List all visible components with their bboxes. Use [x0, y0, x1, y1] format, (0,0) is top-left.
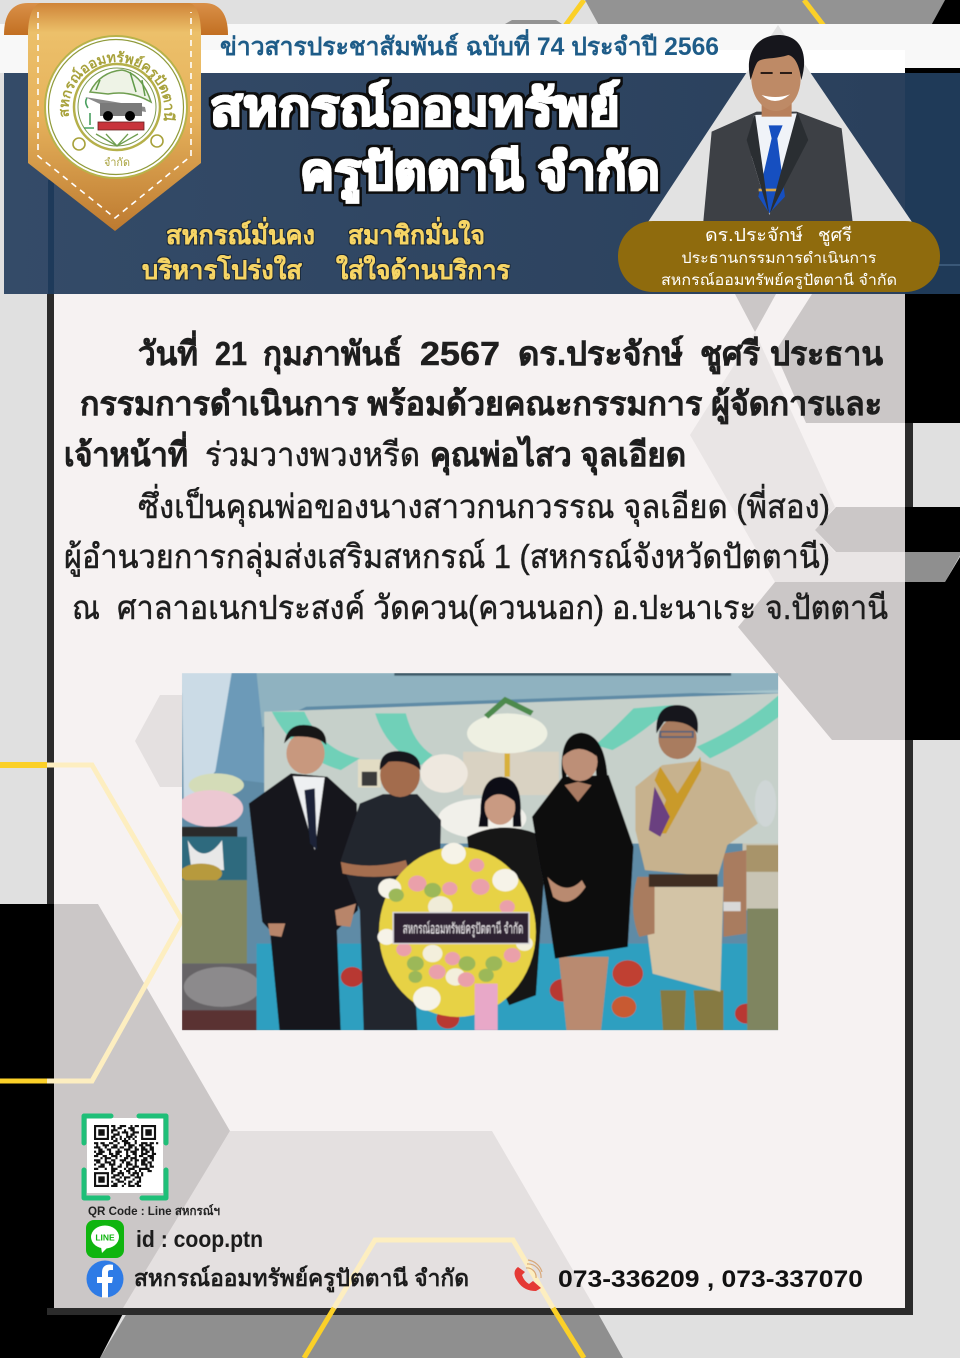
QR caption: QR Code : Line สหกรณ์ฯ [88, 1204, 220, 1218]
icon: LINE [86, 1220, 124, 1258]
icon: ringing phone [514, 1260, 542, 1291]
woman in black dress [532, 733, 633, 1030]
chairman name pill: ประธานกรรมการดำเนินการ [682, 250, 876, 267]
chairman name pill [618, 221, 940, 292]
woman in lace dress [467, 777, 544, 1005]
announcement text block [64, 330, 888, 626]
header white strip [0, 24, 960, 73]
slogan text: สหกรณ์มั่นคง [166, 217, 315, 250]
cooperative logo seal: สหกรณ์ออมทรัพย์ครูปัตตานี [60, 50, 176, 121]
chairman name pill: สหกรณ์ออมทรัพย์ครูปัตตานี จำกัด [661, 272, 897, 289]
announcement text block: ศาลาอเนกประสงค์ [117, 589, 365, 626]
announcement text block: 21 [215, 335, 247, 372]
cooperative logo seal [44, 35, 188, 179]
content panel with dark frame [0, 294, 913, 1315]
man in dark shirt [341, 751, 441, 1030]
icon: LINE: LINE [95, 1232, 115, 1242]
slogan text: ใส่ใจด้านบริการ [336, 255, 510, 285]
slogan text: บริหารโปร่งใส [142, 255, 302, 285]
title: cooperative name: ครูปัตตานี จำกัด [300, 144, 660, 203]
chairman name pill: ชูศรี [818, 225, 852, 246]
announcement text block: ผู้อำนวยการกลุ่มส่งเสริมสหกรณ์ 1 (สหกรณ์จังหวัดปัตตานี) [64, 538, 830, 577]
announcement text block: เจ้าหน้าที่ [64, 431, 188, 473]
announcement text block: วัดควน(ควนนอก) [373, 589, 604, 626]
slogan text [142, 217, 510, 285]
chairman name pill: ดร.ประจักษ์ [705, 225, 803, 245]
slogan text: สมาชิกมั่นใจ [348, 217, 485, 250]
man in black suit [249, 725, 358, 1030]
gold ribbon banner [4, 3, 228, 231]
decorative yellow hexagon outlines [0, 765, 584, 1358]
announcement text block: กุมภาพันธ์ [263, 335, 402, 375]
announcement text block: ดร.ประจักษ์ [518, 335, 684, 372]
LINE id: id : coop.ptn [136, 1226, 263, 1252]
announcement text block: ชูศรี [700, 335, 760, 375]
announcement text block: จ.ปัตตานี [765, 589, 888, 626]
phone numbers: 073-336209 , 073-337070 [558, 1266, 863, 1293]
chairman portrait backdrop triangle [648, 25, 912, 222]
event photo: group with funeral wreath [178, 673, 779, 1031]
cooperative logo seal: จำกัด [104, 157, 130, 169]
scout leader in khaki uniform [633, 705, 758, 1030]
QR code with green corner brackets [84, 1116, 166, 1198]
panel background hexagon shapes [54, 294, 905, 1308]
chairman portrait [703, 35, 853, 222]
announcement text block: ณ [72, 589, 100, 626]
announcement text block: ประธาน [770, 335, 883, 372]
flower wreath [377, 843, 536, 1030]
announcement text block: วันที่ [138, 330, 198, 372]
announcement text block: ร่วมวางพวงหรีด [205, 436, 420, 473]
title: cooperative name: สหกรณ์ออมทรัพย์ [210, 80, 620, 136]
announcement text block: ซึ่งเป็นคุณพ่อของนางสาวกนกวรรณ จุลเอียด (พี่สอง) [138, 484, 830, 527]
title: cooperative name [210, 80, 660, 203]
icon: Facebook [86, 1260, 124, 1298]
announcement text block: กรรมการดำเนินการ พร้อมด้วยคณะกรรมการ ผู้จัดการและ [80, 385, 882, 425]
announcement text block: อ.ปะนาเระ [612, 589, 756, 626]
Facebook page name: สหกรณ์ออมทรัพย์ครูปัตตานี จำกัด [134, 1265, 469, 1293]
flower wreath: สหกรณ์ออมทรัพย์ครูปัตตานี จำกัด [403, 921, 523, 938]
newsletter issue heading: ข่าวสารประชาสัมพันธ์ ฉบับที่ 74 ประจำปี 2566 [220, 29, 719, 61]
header navy band [4, 73, 960, 294]
announcement text block: 2567 [420, 335, 500, 372]
announcement text block: คุณพ่อไสว จุลเอียด [430, 435, 686, 476]
